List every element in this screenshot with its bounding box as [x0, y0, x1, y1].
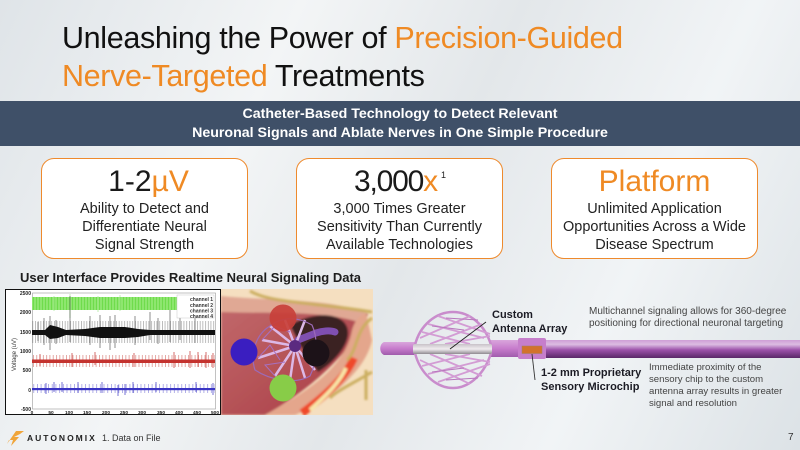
card: sensitivity	[296, 158, 503, 259]
footnote: 1. Data on File	[102, 433, 161, 443]
section heading: User Interface Provides Realtime Neural Signaling Data	[20, 270, 361, 285]
card: signal detection: 1-2µV	[108, 165, 189, 198]
title: Unleashing the Power of Precision-Guided	[62, 21, 623, 55]
logo wordmark: AUTONOMIX	[27, 433, 97, 443]
card: signal detection: Signal Strength	[95, 237, 194, 253]
multichannel note	[589, 306, 786, 329]
catheter shaft	[546, 340, 800, 358]
proximity note: Immediate proximity of the	[649, 362, 762, 373]
red electrode marker	[270, 304, 296, 332]
black electrode marker	[302, 340, 330, 366]
card: sensitivity: 3,000x	[354, 165, 437, 198]
catheter device illustration	[380, 310, 800, 390]
x axis labels	[31, 410, 219, 416]
card: platform: Opportunities Across a Wide	[563, 219, 746, 235]
card: signal detection	[41, 158, 248, 259]
subtitle banner: Catheter-Based Technology to Detect Relevant	[242, 106, 558, 122]
subtitle banner	[0, 101, 800, 146]
subtitle banner: Neuronal Signals and Ablate Nerves in One Simple Procedure	[192, 124, 608, 140]
y axis labels: -500	[21, 407, 31, 413]
card: platform: Unlimited Application	[587, 201, 722, 217]
catheter tip	[380, 342, 416, 355]
chart legend: channel 3	[190, 308, 213, 314]
leader line to antenna	[450, 322, 486, 349]
y axis labels: 2500	[20, 291, 31, 297]
proximity note: signal and resolution	[649, 398, 737, 409]
microchip label: 1-2 mm Proprietary	[541, 367, 641, 379]
card: platform: Platform	[599, 165, 710, 198]
proximity note	[649, 362, 782, 409]
antenna array label	[492, 309, 568, 335]
card: platform: Disease Spectrum	[595, 237, 714, 253]
title	[62, 21, 623, 92]
card: sensitivity: Available Technologies	[326, 237, 473, 253]
card: signal detection: Ability to Detect and	[80, 201, 209, 217]
chart legend: channel 2	[190, 303, 213, 309]
multichannel note: Multichannel signaling allows for 360-degree	[589, 306, 786, 317]
channel 2 trace	[32, 296, 215, 350]
microchip label	[541, 367, 642, 393]
proximity note: sensory chip to the custom	[649, 374, 763, 385]
neural signal line chart	[5, 289, 221, 415]
title: Nerve-Targeted Treatments	[62, 58, 424, 92]
microchip label: Sensory Microchip	[541, 381, 639, 393]
antenna array label: Antenna Array	[492, 323, 567, 335]
y axis labels: 2000	[20, 310, 31, 316]
logo	[7, 431, 97, 446]
chart legend: channel 4	[190, 314, 213, 320]
card: platform	[551, 158, 758, 259]
multichannel note: positioning for directional neuronal targeting	[589, 318, 783, 329]
green electrode marker	[270, 374, 296, 402]
channel 3 trace	[32, 351, 215, 368]
antenna array label: Custom	[492, 309, 533, 321]
chart legend	[177, 295, 214, 320]
blue electrode marker	[230, 338, 258, 366]
sensory microchip	[522, 346, 542, 354]
y axis labels	[20, 291, 31, 413]
sensor collar	[518, 338, 546, 359]
y axis labels: 1500	[20, 330, 31, 336]
card: signal detection: Differentiate Neural	[82, 219, 207, 235]
basket electrode array	[253, 319, 316, 381]
card: sensitivity: 1	[441, 170, 445, 180]
leader line to microchip	[532, 354, 535, 380]
card: sensitivity: Sensitivity Than Currently	[317, 219, 482, 235]
proximity note: antenna array results in greater	[649, 386, 782, 397]
balloon basket	[415, 312, 491, 388]
icon: logo bolt	[7, 431, 24, 446]
page number: 7	[788, 432, 794, 443]
channel 4 trace	[32, 382, 215, 396]
chart legend: channel 1	[190, 297, 213, 303]
catheter shaft	[298, 331, 335, 340]
y axis title: Voltage (uV)	[12, 338, 18, 371]
anatomical catheter image	[221, 289, 373, 415]
y axis labels: 1000	[20, 349, 31, 355]
card: sensitivity: 3,000 Times Greater	[333, 201, 466, 217]
y axis labels: 0	[28, 388, 31, 394]
channel 1 trace	[32, 294, 177, 318]
y axis labels: 500	[23, 368, 31, 374]
